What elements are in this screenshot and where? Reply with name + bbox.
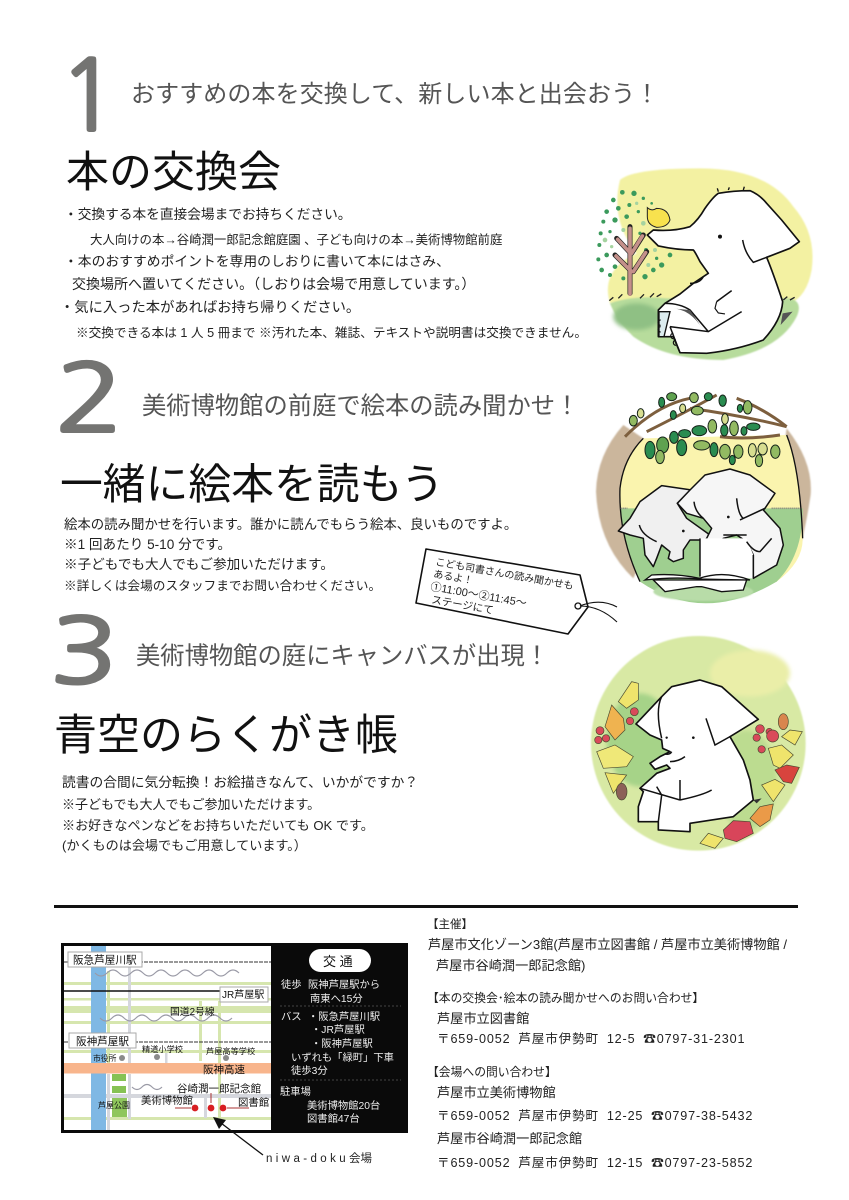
station and landmark labels: 谷崎潤一郎記念館 (177, 1082, 261, 1095)
rivers squiggle (95, 970, 239, 1090)
map panel: 交 通 (323, 954, 353, 969)
text block: scribble details: ※お好きなペンなどをお持ちいただいても OK です。 (62, 818, 374, 833)
green parks (112, 1074, 126, 1081)
tag callout (415, 548, 618, 635)
subtitle 3: 美術博物館の庭にキャンバスが出現！ (136, 643, 549, 670)
map panel: バス (281, 1011, 302, 1023)
station and landmark labels: 芦屋公園 (98, 1100, 130, 1110)
elephant left (618, 486, 710, 567)
text block: organizers and contacts: 芦屋市谷崎潤一郎記念館) (436, 958, 585, 973)
map panel: 徒歩 (281, 978, 302, 991)
arrow to venue (213, 1117, 264, 1156)
text block: book exchange details: 大人向けの本→谷崎潤一郎記念館庭園 、子ども向けの本→美術博物館前庭 (90, 233, 502, 247)
leaves (629, 393, 780, 467)
text block: reading details: 絵本の読み聞かせを行います。誰かに読んでもらう絵本、良いものですよ。 (64, 517, 517, 532)
illustration: elephant reading under a tree with bird (596, 168, 814, 361)
rail lines (64, 962, 271, 1042)
elephant (636, 680, 758, 832)
text block: book exchange details: ・交換する本を直接会場までお持ちください。 (64, 207, 351, 222)
venue label: niwa-doku会場 (266, 1153, 372, 1165)
station and landmark labels (68, 952, 269, 1110)
station and landmark labels: 阪神高速 (203, 1063, 245, 1076)
text block: reading details: ※1 回あたり 5-10 分です。 (64, 537, 231, 552)
text block: book exchange details: 交換場所へ置いてください。（しおりは会場で用意しています。） (72, 276, 475, 292)
number 1: 1 (59, 47, 118, 144)
text block: book exchange details: ※交換できる本は 1 人 5 冊まで ※汚れた本、雑誌、テキストや説明書は交換できません。 (76, 326, 587, 340)
subtitle 2: 美術博物館の前庭で絵本の読み聞かせ！ (142, 393, 579, 420)
highway (64, 1063, 271, 1074)
subtitle 1: おすすめの本を交換して、新しい本と出会おう！ (131, 81, 659, 108)
tree (615, 227, 647, 293)
heading: book exchange: 本の交換会 (66, 149, 281, 197)
branches (625, 395, 787, 438)
station and landmark labels: 芦屋高等学校 (206, 1046, 255, 1056)
illustration: elephant reading with autumn leaves (590, 635, 806, 852)
text block: organizers and contacts: 芦屋市立美術博物館 (437, 1085, 556, 1100)
leaves and berries (595, 682, 802, 848)
text block: scribble details: 読書の合間に気分転換！お絵描きなんて、いかがですか？ (62, 775, 418, 790)
number 2: 2 (55, 352, 124, 445)
text block: book exchange details (60, 207, 587, 340)
text block: organizers and contacts: 【主催】 (427, 919, 473, 931)
map panel: ・阪急芦屋川駅 (308, 1010, 380, 1023)
foliage (596, 190, 672, 280)
station and landmark labels: JR芦屋駅 (222, 989, 264, 1001)
text block: book exchange details: ・本のおすすめポイントを専用のしおりに書いて本にはさみ、 (64, 254, 450, 269)
map panel: 駐車場 (280, 1085, 311, 1098)
text block: organizers and contacts: 芦屋市文化ゾーン3館(芦屋市立図書館 / 芦屋市立美術博物館 / (428, 937, 787, 952)
venue markers (175, 1093, 249, 1108)
map panel: 図書館47台 (307, 1112, 360, 1125)
text block: organizers and contacts: 芦屋市立図書館 (437, 1011, 529, 1026)
map roads (64, 971, 271, 1120)
station and landmark labels: 精道小学校 (142, 1044, 183, 1054)
text block: book exchange details: ・気に入った本があればお持ち帰りください。 (60, 300, 360, 316)
river (91, 946, 106, 1130)
illustration: two elephants reading under a tree (595, 392, 812, 604)
map panel: ・阪神芦屋駅 (311, 1037, 373, 1050)
station and landmark labels: 阪急芦屋川駅 (73, 954, 137, 966)
heading: blue sky scribble book: 青空のらくがき帳 (54, 712, 398, 760)
elephant right (677, 469, 783, 578)
text block: organizers and contacts: 〒659-0052 芦屋市伊勢町 12-5 ☎0797-31-2301 (437, 1032, 745, 1046)
divider (54, 905, 798, 908)
tag callout: あるよ！ (432, 568, 474, 587)
open book and feet (653, 580, 747, 592)
bird (647, 208, 670, 227)
tag callout: こども司書さんの読み聞かせも (434, 555, 575, 592)
map panel: 南東へ15分 (310, 992, 363, 1005)
heading: read picture books together: 一緒に絵本を読もう (60, 461, 444, 509)
map panel: いずれも「緑町」下車 (291, 1051, 394, 1064)
station and landmark labels: 図書館 (238, 1096, 269, 1109)
number 3: 3 (50, 606, 118, 696)
tag callout: ステージにて (430, 594, 494, 617)
transport text (309, 949, 371, 972)
text block: reading details (64, 517, 517, 593)
text block: organizers and contacts: 〒659-0052 芦屋市伊勢町 12-25 ☎0797-38-5432 (437, 1109, 753, 1123)
tag callout: ①11:00〜②11:45〜 (429, 580, 528, 610)
station and landmark labels: 美術博物館 (141, 1094, 193, 1107)
text block: scribble details: ※子どもでも大人でもご参加いただけます。 (62, 797, 320, 812)
map panel: 阪神芦屋駅から (308, 978, 380, 991)
text block: scribble details: (かくものは会場でもご用意しています。） (62, 838, 307, 853)
text block: organizers and contacts: 芦屋市谷崎潤一郎記念館 (437, 1131, 582, 1146)
map panel: 美術博物館20台 (307, 1099, 380, 1112)
text block: reading details: ※子どもでも大人でもご参加いただけます。 (64, 557, 334, 572)
elephant body (647, 191, 799, 353)
station and landmark labels: 市役所 (93, 1053, 117, 1063)
station and landmark labels: 阪神芦屋駅 (76, 1035, 129, 1048)
text block: organizers and contacts: 【会場への問い合わせ】 (427, 1065, 557, 1079)
station and landmark labels: 国道2号線 (170, 1005, 215, 1018)
map panel: 徒歩3分 (291, 1064, 328, 1077)
map panel (61, 943, 408, 1133)
text block: organizers and contacts: 〒659-0052 芦屋市伊勢町 12-15 ☎0797-23-5852 (437, 1156, 753, 1170)
text block: reading details: ※詳しくは会場のスタッフまでお問い合わせください。 (64, 579, 381, 593)
text block: scribble details (62, 775, 418, 853)
text block: organizers and contacts: 【本の交換会･絵本の読み聞かせへのお問い合わせ】 (427, 991, 704, 1005)
map panel: ・JR芦屋駅 (311, 1024, 365, 1036)
